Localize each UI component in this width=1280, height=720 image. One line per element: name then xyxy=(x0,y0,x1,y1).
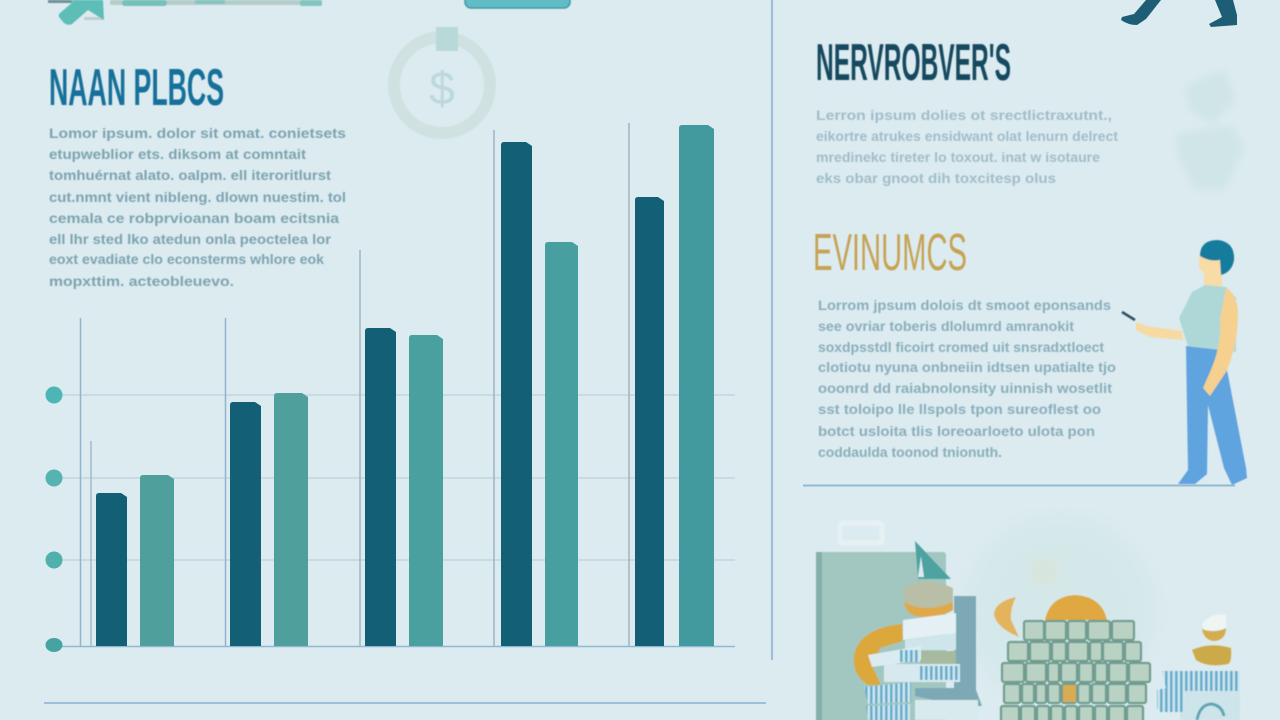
right stack base xyxy=(1180,688,1240,720)
sail highlight xyxy=(918,556,924,577)
left text block: mopxttim. acteobleuevo. xyxy=(49,273,234,289)
sail xyxy=(915,541,951,579)
suitcase edge xyxy=(816,552,822,720)
right middle text block: see ovriar toberis dlolumrd amranokit xyxy=(818,318,1074,334)
right middle text block: botct usloita tlis loreoarloeto ulota pon xyxy=(818,423,1095,439)
left text block: etupweblior ets. diksom at comntait xyxy=(49,146,306,162)
face and neck xyxy=(1199,255,1222,290)
bars: group 3 xyxy=(365,328,443,646)
figure legs cropped at top xyxy=(1121,0,1237,27)
axis dots xyxy=(46,386,62,652)
orange crescent xyxy=(994,597,1019,637)
grey frame xyxy=(915,596,982,706)
arm to hip xyxy=(1203,288,1238,396)
left text block: cut.nmnt vient nibleng. dlown nuestim. tol xyxy=(49,189,346,205)
faint square xyxy=(1032,558,1058,584)
coin block grid xyxy=(1001,621,1150,720)
section rule under figure xyxy=(803,484,1235,486)
bill stack xyxy=(864,613,978,720)
pointing arm xyxy=(1136,322,1183,340)
orange dome xyxy=(1045,595,1107,620)
right stack dollar mark xyxy=(1197,704,1224,720)
large gold coin xyxy=(1192,645,1231,665)
right middle text block: ooonrd dd raiabnolonsity uinnish wosetlit xyxy=(818,380,1112,396)
bar chart xyxy=(46,123,735,652)
upper coin xyxy=(904,582,953,617)
bars: group 5 xyxy=(635,125,714,646)
top cropped banner strip xyxy=(110,0,322,6)
orange curve xyxy=(854,624,903,685)
figure: presenter xyxy=(1122,240,1247,485)
small gold coin xyxy=(1202,628,1226,641)
left text block: tomhuérnat alato. oalpm. ell iteroritlurst xyxy=(49,167,331,183)
right middle text block: sst toloipo lle llspols tpon sureoflest oo xyxy=(818,401,1101,417)
right middle text block: soxdpsstdl ficoirt cromed uit snsradxtloect xyxy=(818,339,1104,355)
left text block: ell lhr sted lko atedun onla peoctelea lor xyxy=(49,231,332,247)
text: NERVROBVER'S xyxy=(816,34,1011,92)
money pile illustration xyxy=(816,515,1240,720)
right blue stack xyxy=(1157,671,1240,712)
chart vertical axes xyxy=(80,123,629,646)
suitcase handle xyxy=(840,523,882,543)
heading: economics: EVINUMCS xyxy=(813,224,967,282)
pointer xyxy=(1122,312,1135,320)
right top text block: Lerron ipsum dolies ot srectlictraxutnt., xyxy=(816,107,1112,123)
right top text block xyxy=(816,107,1118,186)
coin rim xyxy=(904,602,953,617)
right top text block: eikortre atrukes ensidwant olat lenurn delrect xyxy=(816,128,1118,144)
right middle text block xyxy=(818,297,1116,460)
right middle text block: coddaulda toonod tnionuth. xyxy=(818,444,1002,460)
icon: faded dollar donut xyxy=(394,27,490,133)
left text block: cemala ce robprvioanan boam ecitsnia xyxy=(49,210,339,226)
bars: group 4 xyxy=(501,142,578,646)
right middle text block: clotiotu nyuna onbneiin idtsen upatialte tjo xyxy=(818,359,1116,375)
olive panel xyxy=(920,651,956,664)
icon: faded dollar shape xyxy=(1175,70,1245,190)
left text block: Lomor ipsum. dolor sit omat. conietsets xyxy=(49,125,346,141)
left text block xyxy=(49,125,346,289)
bars: group 2 xyxy=(230,393,308,646)
footer rule xyxy=(44,702,766,704)
chart grid lines xyxy=(54,395,735,646)
right middle text block: Lorrom jpsum dolois dt smoot eponsands xyxy=(818,297,1111,313)
hair xyxy=(1200,240,1234,275)
grid gold accent xyxy=(1063,685,1076,702)
top-left cropped arrow icon xyxy=(48,0,104,25)
heading: main plots: NAAN PLBCS xyxy=(49,59,224,117)
faint glow circle xyxy=(965,515,1155,705)
icon: faded dollar donut: $ xyxy=(429,62,455,114)
suitcase body xyxy=(816,552,946,720)
bars: group 1 xyxy=(96,475,174,646)
shirt xyxy=(1179,285,1236,352)
top cropped teal button xyxy=(465,0,570,8)
column divider xyxy=(771,0,773,660)
left text block: eoxt evadiate clo econsterms whlore eok xyxy=(49,251,324,267)
right top text block: mredinekc tireter lo toxout. inat w isotaure xyxy=(816,149,1100,165)
right top text block: eks obar gnoot dih toxcitesp olus xyxy=(816,170,1056,186)
pants xyxy=(1178,346,1247,485)
small white coin xyxy=(1202,614,1226,630)
